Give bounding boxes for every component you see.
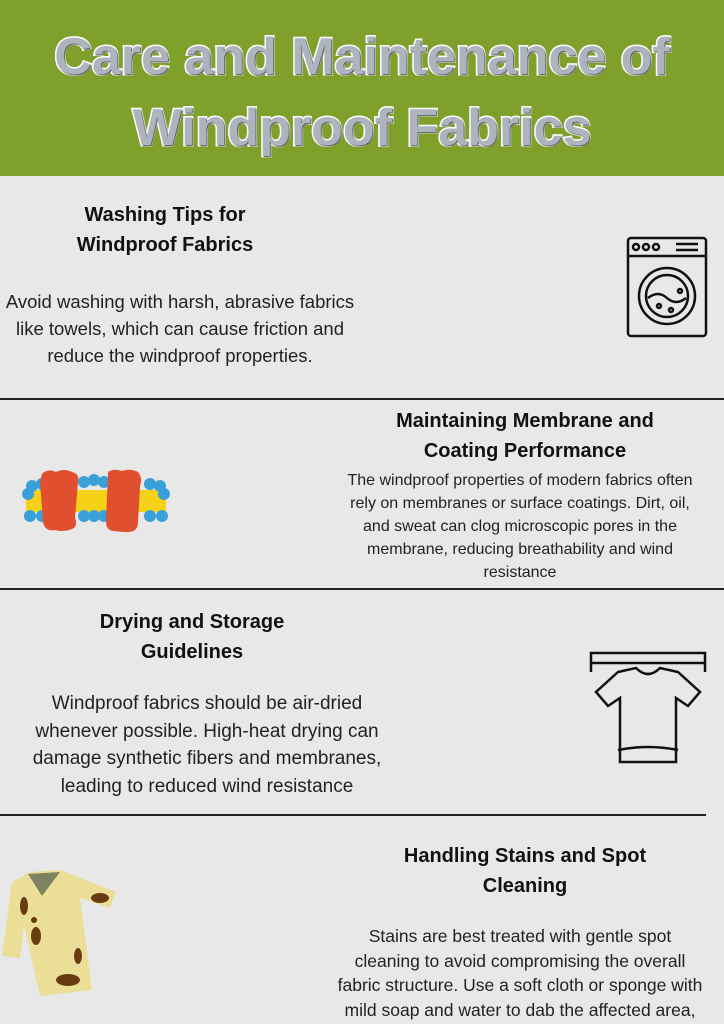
section 3 heading [100, 611, 284, 663]
section 3 text [33, 693, 381, 796]
title banner [0, 0, 724, 176]
section 4 text: Stains are best treated with gentle spot [369, 926, 671, 946]
section 4 text: fabric structure. Use a soft cloth or sponge with [338, 975, 702, 995]
section 2 text: resistance [484, 564, 556, 581]
section 4 text [338, 926, 702, 1020]
section 3 text: damage synthetic fibers and membranes, [33, 748, 381, 769]
section 2 text: membrane, reducing breathability and wind [367, 541, 673, 558]
section 4 text: cleaning to avoid compromising the overall [355, 950, 685, 970]
section 3 heading: Guidelines [141, 641, 243, 663]
section 2 text: rely on membranes or surface coatings. Dirt, oil, [350, 495, 690, 512]
section 1 text: reduce the windproof properties. [47, 345, 313, 366]
section 3 heading: Drying and Storage [100, 611, 284, 633]
icon: stained coat [2, 870, 116, 996]
section 2 text: The windproof properties of modern fabrics often [347, 472, 693, 489]
title: Windproof Fabrics [133, 99, 591, 157]
title [54, 28, 672, 158]
section 4 heading [404, 845, 646, 897]
section 1 text: Avoid washing with harsh, abrasive fabrics [6, 291, 354, 312]
icon: washing machine [626, 236, 708, 338]
title: Care and Maintenance of [54, 28, 670, 86]
section 1 heading [76, 204, 253, 256]
section 1 text: like towels, which can cause friction and [16, 318, 344, 339]
section 1 text [6, 291, 354, 366]
section 4 heading: Handling Stains and Spot [404, 845, 646, 867]
section 4 heading: Cleaning [483, 875, 567, 897]
section 2 text: and sweat can clog microscopic pores in the [363, 518, 677, 535]
section 2 heading [396, 410, 654, 462]
section 2 heading: Maintaining Membrane and [396, 410, 654, 432]
section 4 text: mild soap and water to dab the affected area, [345, 1000, 695, 1020]
section 3 text: Windproof fabrics should be air-dried [52, 693, 362, 714]
section 1 heading: Washing Tips for [84, 204, 246, 226]
icon: shirt on line [590, 652, 706, 764]
section 2 text [347, 472, 693, 581]
section 3 text: leading to reduced wind resistance [61, 776, 353, 796]
icon: membrane [22, 470, 170, 532]
section 1 heading: Windproof Fabrics [77, 234, 253, 256]
section 2 heading: Coating Performance [424, 440, 626, 462]
section 3 text: whenever possible. High-heat drying can [35, 720, 379, 742]
